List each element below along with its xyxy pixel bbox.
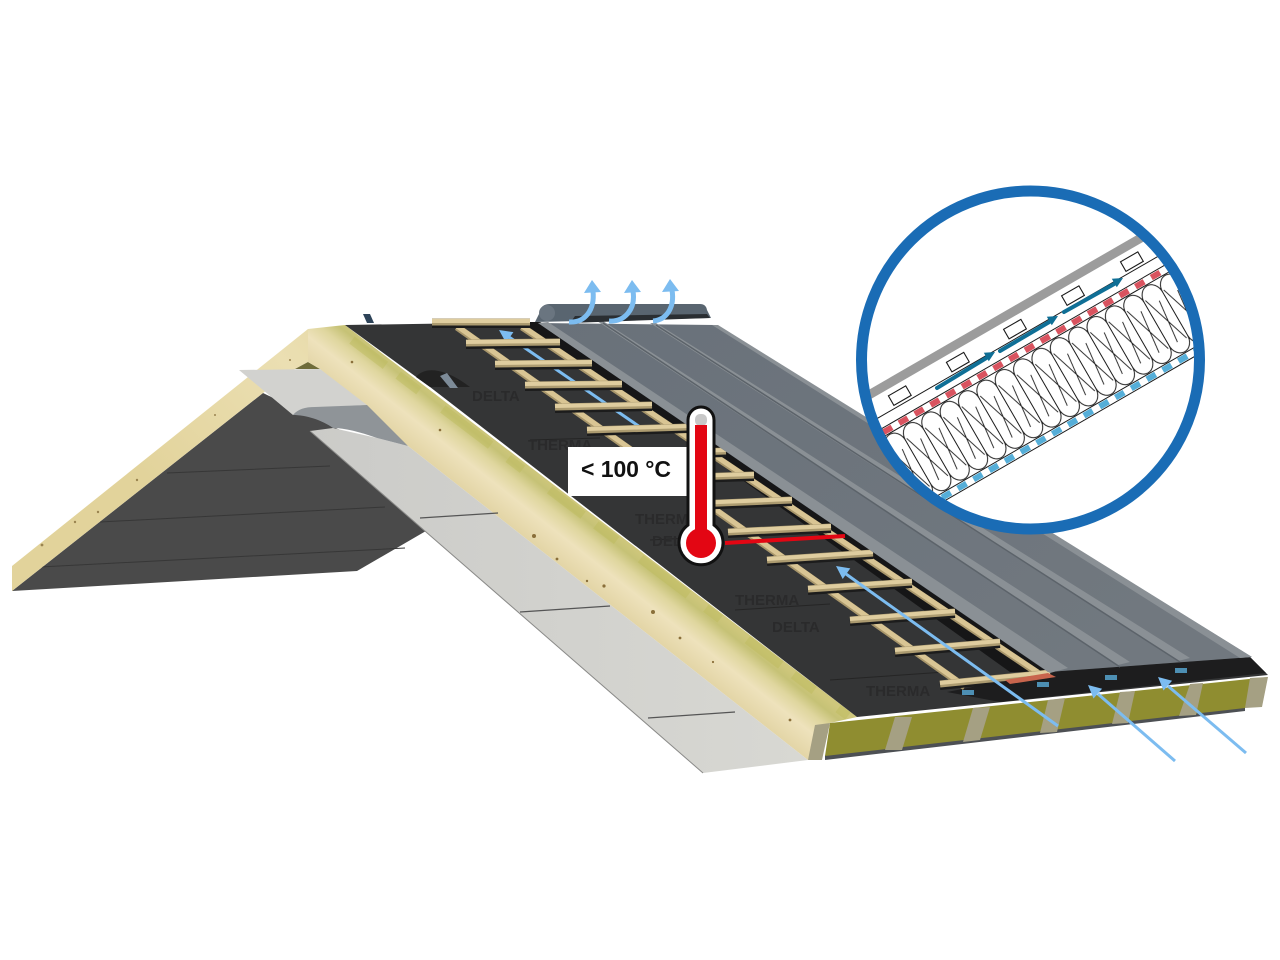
wood knots [351, 361, 791, 721]
ridge vent [535, 304, 711, 323]
lower membrane lines [938, 347, 1194, 500]
section drawing [870, 236, 1194, 500]
red leader line [725, 536, 845, 543]
membrane print: DELTA [772, 619, 820, 636]
upper sheet [239, 369, 367, 415]
rafter ends [808, 677, 1268, 760]
flap detail [416, 370, 470, 388]
lens ring [862, 191, 1200, 529]
membrane print: THERMA [635, 511, 699, 528]
batten ventilation line and arrow, upper [499, 330, 640, 427]
apex notch [295, 362, 320, 369]
airflow arrows out of ridge [569, 279, 679, 322]
batten feet [962, 668, 1187, 695]
detail lens: roof section [856, 186, 1205, 534]
curled foil [293, 405, 408, 446]
metal sheet layer [870, 236, 1144, 398]
red strip at eave [1005, 673, 1056, 684]
air gap and membrane lines [878, 256, 1169, 436]
ventilation arrows [937, 278, 1123, 388]
shadow beside metal [522, 322, 1050, 672]
left gable rafter [12, 329, 308, 591]
membrane print: THERMA [866, 683, 930, 700]
roof infographic [12, 186, 1268, 774]
insulation coils [886, 273, 1193, 492]
airflow arrows into eave [836, 566, 1246, 761]
temperature label [568, 447, 688, 496]
counter batten rails [457, 326, 1042, 687]
membrane print: DELTA [472, 388, 520, 405]
standing seams [538, 321, 1252, 673]
membrane print: THERMA [528, 437, 592, 454]
left gable membrane [12, 393, 450, 591]
lower sheet [310, 428, 808, 773]
dark roofing membrane [345, 322, 1268, 717]
membrane print: DELTA [652, 533, 700, 550]
small clip [363, 314, 374, 323]
rafter and wool strip [308, 325, 857, 760]
blue layer [940, 349, 1194, 500]
wool mottling [352, 340, 848, 716]
temperature label: < 100 °C [581, 456, 671, 482]
metal standing seam roof [538, 321, 1252, 673]
seam shadows [603, 323, 1180, 667]
battens [432, 321, 1050, 687]
eave front [808, 677, 1268, 760]
battens [888, 252, 1143, 405]
red vapour layer [882, 270, 1162, 435]
membrane print [472, 388, 930, 700]
thermometer [679, 407, 723, 565]
membrane print: THERMA [735, 592, 799, 609]
